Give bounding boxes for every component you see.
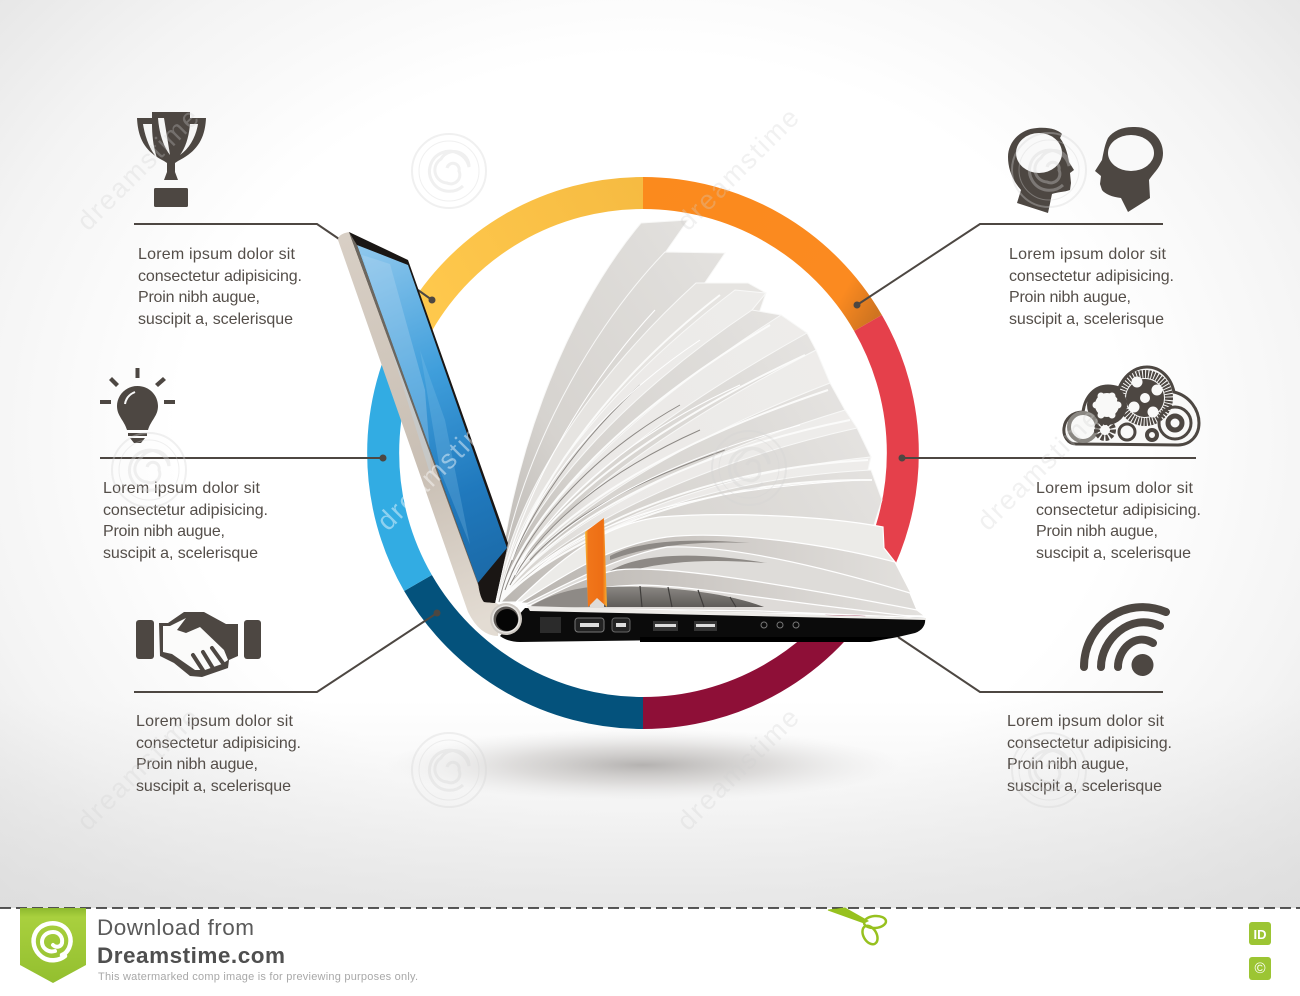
segmented colour ring xyxy=(383,193,903,713)
text: middle left xyxy=(103,480,268,562)
badge: ID xyxy=(1249,922,1271,945)
text: top right: consectetur adipisicing. xyxy=(1009,268,1174,285)
text: top right xyxy=(1009,246,1174,328)
text: middle right: Lorem ipsum dolor sit xyxy=(1036,480,1194,497)
footer text xyxy=(97,915,418,983)
footer text: Dreamstime.com xyxy=(97,943,285,968)
lower page bands xyxy=(516,515,927,618)
badge: ID: ID xyxy=(1254,927,1266,942)
orange bookmark xyxy=(585,518,607,607)
text: middle left: consectetur adipisicing. xyxy=(103,502,268,519)
watermark: dreamstime xyxy=(971,401,1106,536)
text: top left: consectetur adipisicing. xyxy=(138,268,302,285)
watermark xyxy=(71,101,1106,836)
text: top left xyxy=(138,246,302,328)
laptop lid and screen xyxy=(338,232,508,636)
footer logo badge xyxy=(20,908,86,983)
icon: light bulb xyxy=(100,368,175,443)
footer text: This watermarked comp image is for previewing purposes only. xyxy=(98,971,418,983)
text: middle left: suscipit a, scelerisque xyxy=(103,545,258,562)
text: bottom right: Proin nibh augue, xyxy=(1007,756,1129,773)
watermark: dreamstime xyxy=(671,701,806,836)
laptop hinge xyxy=(490,603,522,635)
keyboard under pages xyxy=(528,586,764,608)
badge: copyright: © xyxy=(1254,960,1266,977)
text: middle right: Proin nibh augue, xyxy=(1036,523,1158,540)
text: top right: suscipit a, scelerisque xyxy=(1009,311,1164,328)
footer band xyxy=(0,908,1300,996)
text: bottom left: consectetur adipisicing. xyxy=(136,735,301,752)
watermark: dreamstime xyxy=(671,101,806,236)
watermark: dreamstime xyxy=(371,401,506,536)
text: top left: suscipit a, scelerisque xyxy=(138,311,293,328)
dashed cut line xyxy=(0,907,1300,909)
text: middle right xyxy=(1036,480,1201,562)
text: bottom right xyxy=(1007,713,1172,795)
text: middle right: suscipit a, scelerisque xyxy=(1036,545,1191,562)
icon: trophy xyxy=(137,112,206,207)
text: middle right: consectetur adipisicing. xyxy=(1036,502,1201,519)
icon: wifi xyxy=(1084,607,1166,676)
icon: handshake xyxy=(136,612,261,677)
icon: cloud of gears xyxy=(1064,367,1199,445)
watermark: dreamstime xyxy=(71,701,206,836)
leader lines and dots xyxy=(100,224,1196,692)
ground shadow xyxy=(385,729,901,801)
text: top left: Lorem ipsum dolor sit xyxy=(138,246,296,263)
footer text: Download from xyxy=(97,915,254,940)
text: bottom right: suscipit a, scelerisque xyxy=(1007,778,1162,795)
text: bottom left xyxy=(136,713,301,795)
laptop base with ports xyxy=(500,606,926,642)
text: bottom right: consectetur adipisicing. xyxy=(1007,735,1172,752)
text: middle left: Lorem ipsum dolor sit xyxy=(103,480,261,497)
text: bottom left: suscipit a, scelerisque xyxy=(136,778,291,795)
text: middle left: Proin nibh augue, xyxy=(103,523,225,540)
text: top left: Proin nibh augue, xyxy=(138,289,260,306)
badge: copyright xyxy=(1249,957,1271,980)
watermark: dreamstime xyxy=(71,101,206,236)
icon: scissors xyxy=(828,908,886,947)
text: bottom left: Proin nibh augue, xyxy=(136,756,258,773)
text: bottom right: Lorem ipsum dolor sit xyxy=(1007,713,1165,730)
icon: two heads xyxy=(1008,127,1163,213)
text: top right: Lorem ipsum dolor sit xyxy=(1009,246,1167,263)
text: top right: Proin nibh augue, xyxy=(1009,289,1131,306)
text: bottom left: Lorem ipsum dolor sit xyxy=(136,713,294,730)
book pages fanned from laptop xyxy=(497,220,927,618)
thin page edges xyxy=(499,295,872,602)
